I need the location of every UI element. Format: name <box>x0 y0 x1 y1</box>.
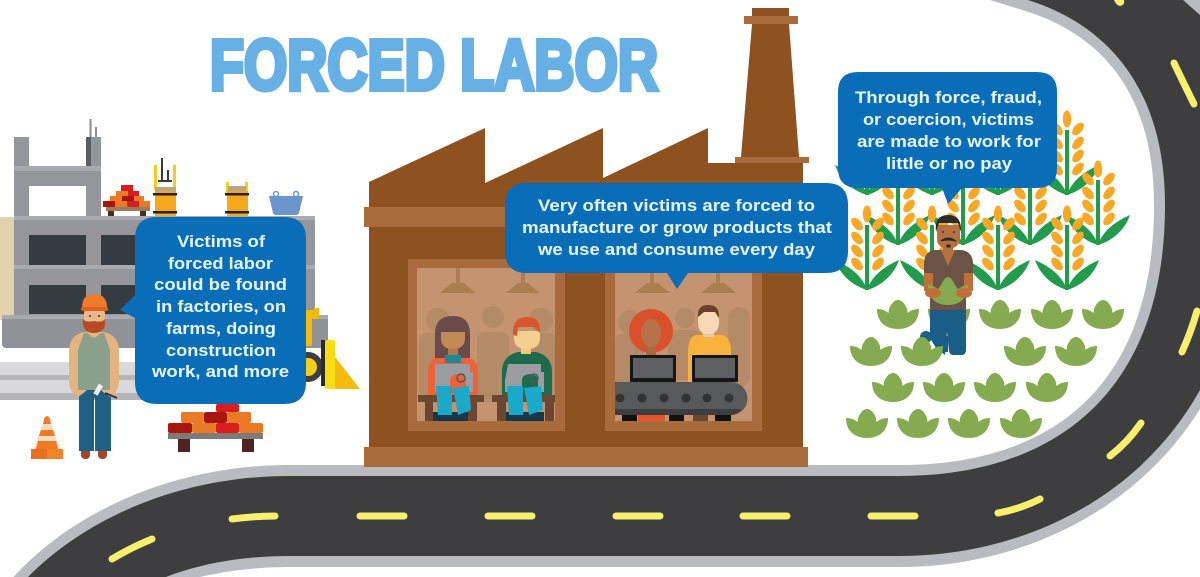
callout: victims of forced labor: in factories, on <box>156 297 286 316</box>
callout: victims of forced labor: farms, doing <box>166 319 276 338</box>
callout: products we use: manufacture or grow products that <box>522 218 832 237</box>
lower brick pile <box>168 404 263 452</box>
male sewer <box>492 317 555 421</box>
left window <box>408 259 565 431</box>
yellow bucket <box>225 182 249 216</box>
callout: products we use <box>505 183 848 289</box>
seamstress <box>418 316 484 421</box>
conveyor belt <box>615 382 748 421</box>
right window <box>605 259 762 431</box>
construction worker <box>69 294 119 459</box>
callout: victims of forced labor <box>120 217 306 404</box>
blue basket <box>269 192 303 215</box>
callout: products we use: we use and consume every day <box>537 240 816 259</box>
construction site <box>0 119 360 459</box>
farmer <box>920 215 973 355</box>
leafy crops behind farmer <box>877 300 1124 329</box>
factory <box>364 8 809 467</box>
wheat field <box>835 110 1130 290</box>
callout: force fraud coercion <box>838 72 1057 204</box>
curly-haired worker <box>629 309 673 358</box>
title: FORCED LABOR <box>210 26 658 106</box>
callout: victims of forced labor: Victims of <box>177 232 265 251</box>
chimney <box>735 8 809 163</box>
callout: victims of forced labor: forced labor <box>168 254 273 273</box>
callout: victims of forced labor: construction <box>166 341 276 360</box>
monitors <box>630 355 738 382</box>
callout: products we use: Very often victims are forced to <box>538 196 815 215</box>
yellow bucket with tools <box>153 158 177 216</box>
leafy crops in front <box>846 337 1097 438</box>
callout: force fraud coercion: are made to work for <box>857 132 1041 151</box>
factory wall and roof <box>369 128 803 448</box>
callout: victims of forced labor: could be found <box>154 275 287 294</box>
upper brick pile <box>103 185 150 216</box>
building <box>0 119 328 400</box>
callout: force fraud coercion: little or no pay <box>886 154 1013 173</box>
male line worker <box>688 305 731 382</box>
callout: force fraud coercion: Through force, fraud, <box>855 88 1042 107</box>
traffic cone <box>31 416 63 459</box>
callout: force fraud coercion: or coercion, victims <box>863 110 1034 129</box>
callout: victims of forced labor: work, and more <box>151 362 289 381</box>
bulldozer <box>293 308 360 389</box>
